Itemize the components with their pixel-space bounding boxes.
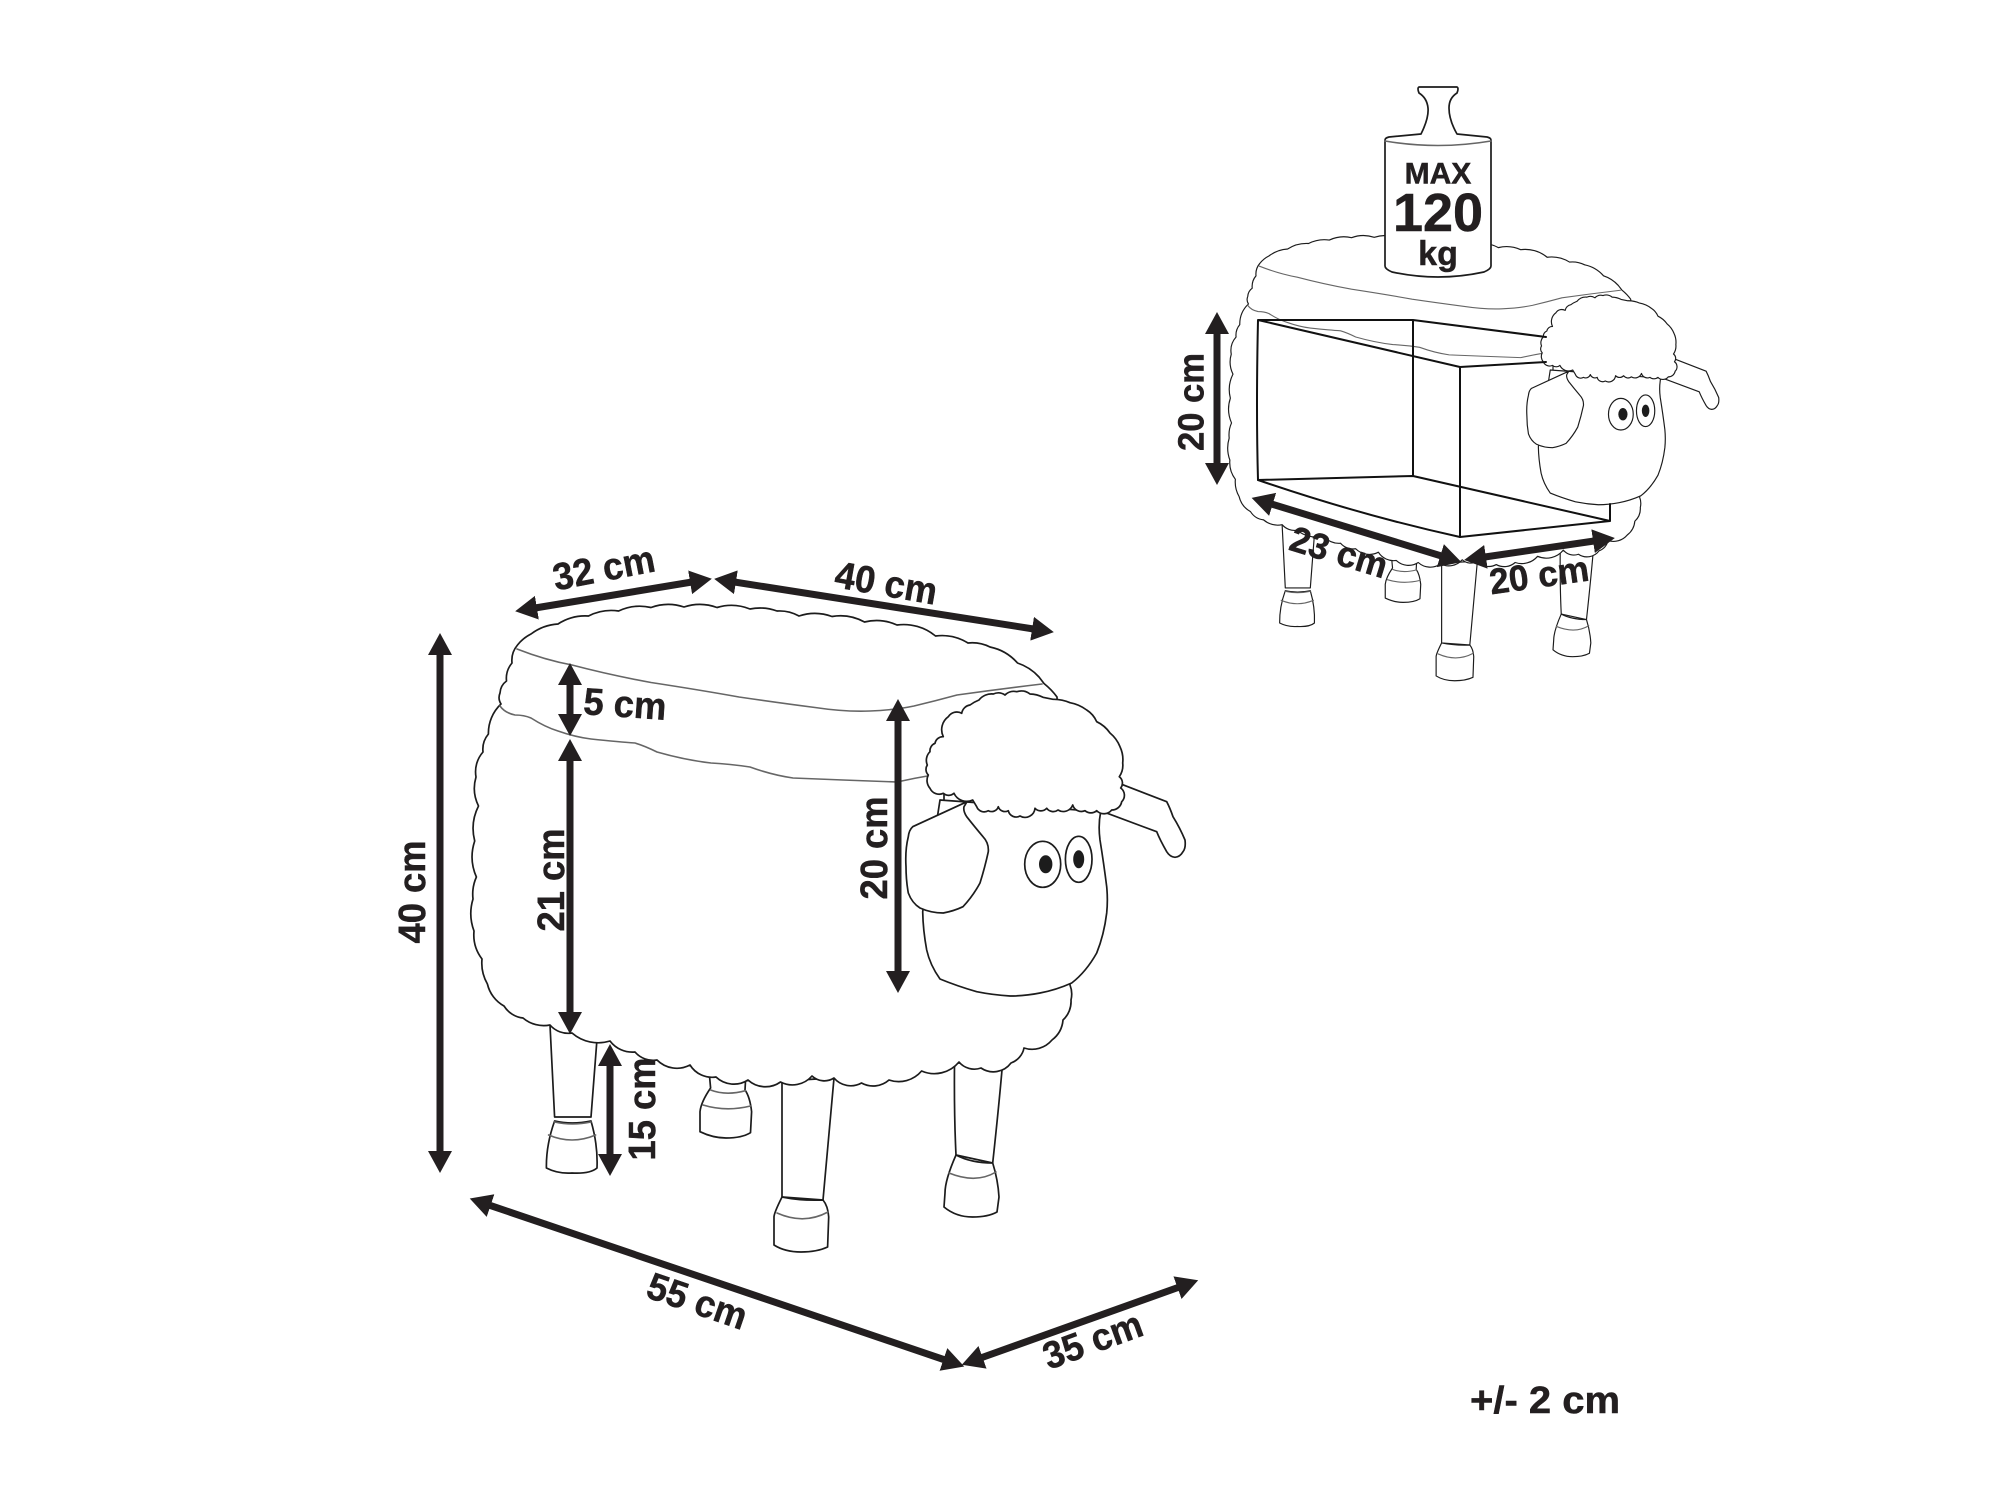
label: 15 cm: 15 cm: [622, 1058, 664, 1160]
arrow: storage height 20 cm: [1214, 326, 1220, 471]
weight label: 120: 120: [1393, 183, 1483, 243]
arrow: seat length 40 cm: [728, 581, 1040, 630]
right eye: [1065, 836, 1092, 882]
label: 32 cm: 32 cm: [549, 539, 659, 599]
back left leg: [546, 1025, 597, 1173]
rear hidden leg: [700, 1076, 752, 1138]
main sheep stool drawing: [471, 604, 1185, 1252]
small sheep with storage cube: [1228, 236, 1719, 681]
head wool: [926, 691, 1124, 817]
weight limit icon: [1385, 87, 1491, 277]
arrow: base length 55 cm: [483, 1203, 951, 1362]
label: 35 cm: 35 cm: [1037, 1304, 1149, 1378]
arrow: front 20 cm: [894, 713, 902, 979]
front leg: [774, 1078, 834, 1252]
label: 23 cm: 23 cm: [1285, 518, 1393, 586]
storage compartment cube: [1257, 320, 1610, 537]
label: storage width 20 cm: 20 cm: [1487, 548, 1591, 602]
head neck line: [943, 793, 945, 811]
right ear: [1103, 784, 1185, 857]
arrow: storage length 23 cm: [1265, 502, 1448, 558]
weight label: kg: kg: [1418, 235, 1458, 273]
left ear: [906, 802, 988, 913]
tolerance note: +/- 2 cm: [1470, 1380, 1620, 1422]
seat seam lines: [500, 649, 1042, 782]
weight label: MAX: MAX: [1405, 158, 1471, 190]
label: 40 cm length: 40 cm: [832, 554, 940, 614]
arrow: base width 35 cm: [975, 1285, 1185, 1360]
label: 40 cm height: 40 cm: [392, 840, 434, 944]
right leg: [944, 1063, 1003, 1217]
label: 55 cm: 55 cm: [641, 1265, 753, 1339]
arrow: leg 15 cm: [606, 1058, 614, 1162]
arrow: seat depth 32 cm: [529, 581, 698, 609]
woolly body: [471, 604, 1072, 1087]
left eye: [1025, 841, 1061, 887]
arrow: storage width 20 cm: [1478, 540, 1601, 558]
face: [923, 800, 1107, 996]
arrow: body 21 cm: [566, 753, 574, 1020]
label: storage height 20 cm: 20 cm: [1170, 353, 1212, 451]
label: 21 cm: 21 cm: [531, 828, 573, 932]
label: 5 cm: 5 cm: [582, 681, 668, 729]
arrow: overall height 40 cm: [436, 647, 444, 1159]
label: 20 cm front: 20 cm: [854, 796, 896, 900]
arrow: cushion 5 cm: [566, 677, 574, 722]
